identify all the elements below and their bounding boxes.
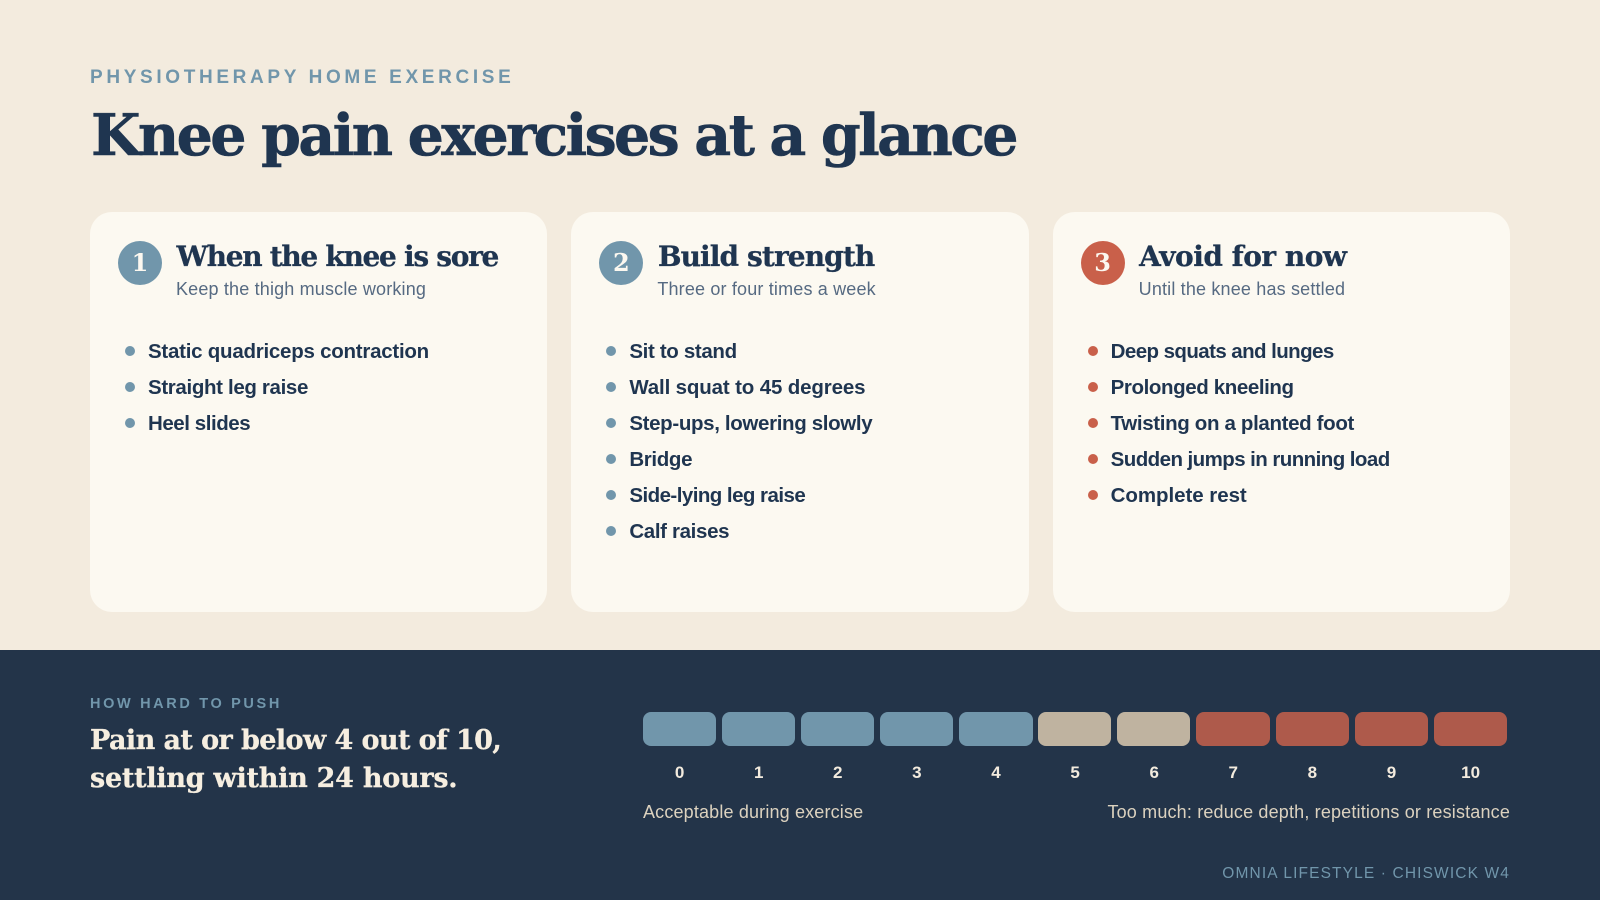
scale numbers: 7: [1229, 762, 1238, 782]
scale numbers: 5: [1070, 762, 1080, 782]
list: things to avoid: [1088, 340, 1390, 507]
step number 1: 1: [132, 248, 148, 277]
panel subheading: Three or four times a week: [657, 279, 876, 299]
step number 2: [599, 241, 643, 285]
credit: OMNIA LIFESTYLE · CHISWICK W4: [1222, 865, 1510, 882]
panel: avoid for now: [1053, 212, 1510, 612]
scale numbers: 1: [754, 762, 763, 782]
eyebrow label: PHYSIOTHERAPY HOME EXERCISE: [90, 67, 514, 88]
panel: build strength: [571, 212, 1029, 612]
pain guidance statement: Pain at or below 4 out of 10,: [90, 724, 501, 756]
scale numbers: 9: [1387, 762, 1396, 782]
scale numbers: 4: [991, 762, 1001, 782]
scale numbers: 0: [675, 762, 684, 782]
list: strength exercises: Sit to stand: [629, 340, 737, 363]
scale numbers: 10: [1461, 762, 1480, 782]
scale numbers: 3: [912, 762, 922, 782]
band label: HOW HARD TO PUSH: [90, 696, 282, 712]
scale numbers: 6: [1149, 762, 1159, 782]
panel subheading: Until the knee has settled: [1139, 279, 1345, 299]
scale numbers: 8: [1308, 762, 1317, 782]
scale caption: acceptable: Acceptable during exercise: [643, 802, 863, 822]
pain guidance statement: settling within 24 hours.: [90, 762, 457, 794]
step number 3: [1081, 241, 1125, 285]
title: Knee pain exercises at a glance: [91, 102, 1016, 169]
list: things to avoid: Complete rest: [1111, 484, 1247, 507]
pain guidance statement: [90, 724, 501, 794]
list: strength exercises: [606, 340, 872, 543]
list: strength exercises: Side-lying leg raise: [629, 484, 805, 507]
list: exercises when sore: Straight leg raise: [148, 376, 308, 399]
list: things to avoid: Sudden jumps in running load: [1111, 448, 1390, 471]
panel: when the knee is sore: [90, 212, 547, 612]
list: things to avoid: Twisting on a planted foot: [1111, 412, 1354, 435]
step number 1: [118, 241, 162, 285]
panel heading: Avoid for now: [1139, 240, 1347, 273]
panel heading: Build strength: [658, 240, 874, 273]
list: strength exercises: Bridge: [629, 448, 692, 471]
step number 2: 2: [613, 248, 630, 277]
panel heading: When the knee is sore: [176, 240, 498, 273]
list: things to avoid: Deep squats and lunges: [1111, 340, 1334, 363]
list: exercises when sore: Static quadriceps contraction: [148, 340, 429, 363]
scale caption: too much: Too much: reduce depth, repetitions or resistance: [1107, 802, 1510, 822]
list: strength exercises: Wall squat to 45 degrees: [629, 376, 865, 399]
footer band: [0, 650, 1600, 900]
list: strength exercises: Step-ups, lowering slowly: [629, 412, 872, 435]
scale numbers: 2: [833, 762, 843, 782]
step number 3: 3: [1094, 248, 1111, 277]
list: exercises when sore: Heel slides: [148, 412, 250, 435]
list: exercises when sore: [125, 340, 429, 435]
panel subheading: Keep the thigh muscle working: [176, 279, 426, 299]
list: things to avoid: Prolonged kneeling: [1111, 376, 1294, 399]
list: strength exercises: Calf raises: [629, 520, 729, 543]
